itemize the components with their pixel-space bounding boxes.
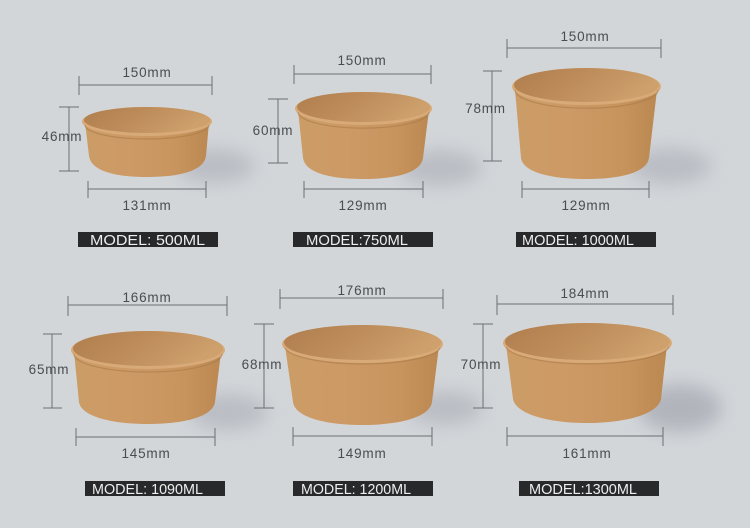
label: MODEL 1300ML: MODEL:1300ML	[529, 481, 637, 498]
dimensions: 750ML: 150mm	[337, 53, 387, 68]
label: MODEL 750ML: MODEL:750ML	[306, 232, 408, 249]
dimensions: 1300ML: 70mm	[461, 357, 501, 372]
dimensions: 1200ML: 68mm	[242, 357, 282, 372]
icon: 500ML paper bowl	[82, 107, 255, 183]
panel: 1090ML bowl	[29, 290, 268, 498]
dimensions: 1090ML	[29, 290, 227, 461]
dimensions: 1000ML	[465, 29, 661, 213]
dimensions: 1090ML: 145mm	[121, 446, 171, 461]
label: MODEL 1000ML: MODEL: 1000ML	[522, 232, 634, 249]
dimensions: 500ML: 131mm	[122, 198, 172, 213]
dimensions: 1200ML	[242, 283, 443, 461]
icon: 1090ML paper bowl	[71, 331, 268, 430]
label: MODEL 500ML: MODEL: 500ML	[90, 232, 205, 249]
dimensions: 1200ML: 149mm	[337, 446, 387, 461]
dimensions: 1300ML	[461, 286, 673, 461]
dimensions: 1000ML: 78mm	[465, 101, 506, 116]
dimensions: 750ML: 129mm	[338, 198, 388, 213]
dimensions: 500ML	[42, 65, 212, 213]
dimensions: 1000ML: 150mm	[560, 29, 610, 44]
icon: 1000ML paper bowl	[512, 68, 712, 184]
panel: 1200ML bowl	[242, 283, 483, 498]
dimensions: 1090ML: 166mm	[122, 290, 172, 305]
label: MODEL 1200ML: MODEL: 1200ML	[301, 481, 411, 498]
dimensions: 1300ML: 161mm	[562, 446, 612, 461]
dimensions: 750ML	[253, 53, 431, 213]
panel: 500ML bowl	[42, 65, 255, 249]
dimensions: 750ML: 60mm	[253, 123, 293, 138]
dimensions: 1000ML: 129mm	[561, 198, 611, 213]
panel: 1300ML bowl	[461, 286, 722, 498]
panel: 1000ML bowl	[465, 29, 712, 249]
dimensions: 1200ML: 176mm	[337, 283, 387, 298]
icon: 1300ML paper bowl	[503, 323, 722, 432]
dimensions: 1300ML: 184mm	[560, 286, 610, 301]
icon: 1200ML paper bowl	[282, 325, 483, 425]
dimensions: 1090ML: 65mm	[29, 362, 69, 377]
dimensions: 500ML: 46mm	[42, 129, 82, 144]
panel: 750ML bowl	[253, 53, 482, 249]
label: MODEL 1090ML: MODEL: 1090ML	[92, 481, 203, 498]
dimensions: 500ML: 150mm	[122, 65, 172, 80]
icon: 750ML paper bowl	[295, 92, 482, 186]
